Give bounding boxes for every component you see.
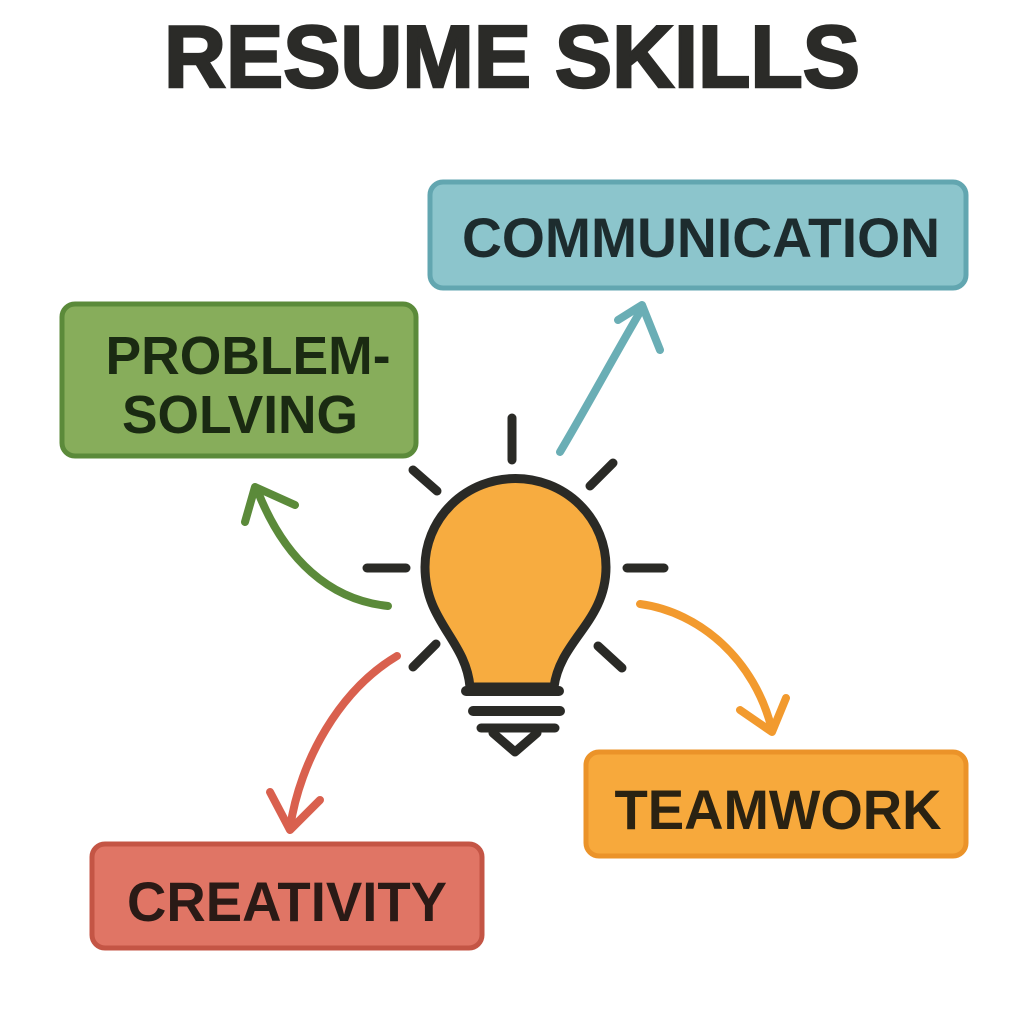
box: problem-solving: PROBLEM- — [106, 326, 390, 386]
box: problem-solving — [62, 304, 416, 456]
box: problem-solving: SOLVING — [122, 385, 358, 445]
box: creativity: CREATIVITY — [127, 870, 447, 933]
rays — [367, 418, 664, 668]
title: RESUME SKILLS — [164, 7, 860, 106]
box: communication: COMMUNICATION — [462, 206, 940, 269]
arrow: to creativity — [270, 656, 397, 830]
icon: light bulb — [367, 418, 664, 752]
box: teamwork: TEAMWORK — [614, 778, 942, 841]
arrow: to teamwork — [640, 604, 786, 732]
box: communication — [430, 182, 966, 288]
box: creativity — [92, 844, 482, 948]
arrow: to problem-solving — [245, 487, 388, 606]
arrow: to communication — [560, 305, 660, 452]
box: teamwork — [586, 752, 966, 856]
